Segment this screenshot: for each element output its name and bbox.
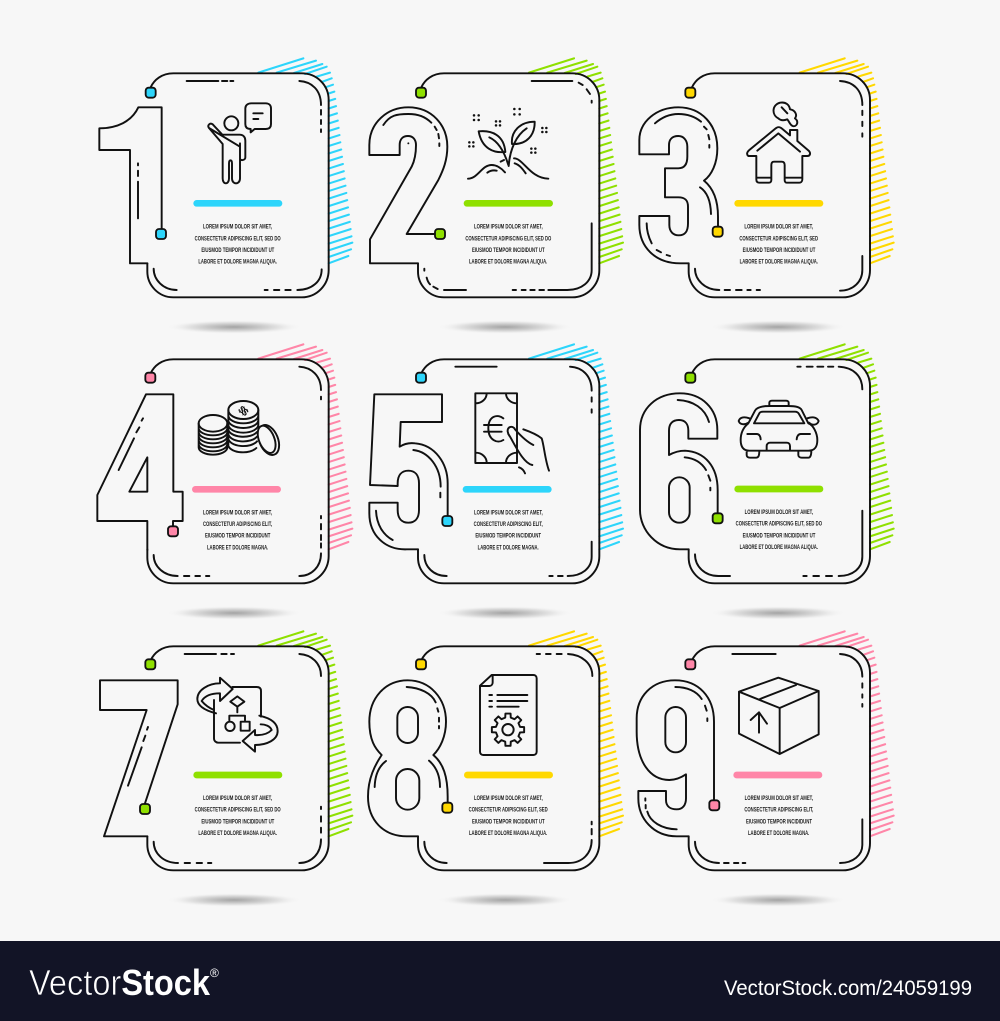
text block: CONSECTETUR ADIPISCING ELIT, SED DO (465, 235, 551, 242)
text block: EIUSMOD TEMPOR INCIDIDUNT UT (201, 247, 274, 254)
text block: LABORE ET DOLORE MAGNA ALIQUA. (198, 259, 277, 266)
frame (418, 359, 599, 583)
hatching (800, 58, 894, 263)
text block: CONSECTETUR ADIPISCING ELIT, (474, 521, 543, 528)
text block (736, 509, 822, 551)
text block: LOREM IPSUM DOLOR SIT AMET, (474, 509, 543, 516)
text block: EIUSMOD TEMPOR INCIDIDUNT (475, 533, 541, 540)
icon: person with speech bubble (208, 103, 271, 183)
text block: LOREM IPSUM DOLOR SIT AMET, (474, 795, 543, 802)
panel: card 4 (97, 344, 352, 583)
connector dot top (685, 88, 695, 98)
connector dot top (145, 373, 155, 383)
text block: LOREM IPSUM DOLOR SIT AMET, (745, 509, 813, 516)
panel: card 3 (639, 58, 894, 297)
frame (147, 359, 329, 583)
text block: CONSECTETUR ADIPISCING ELIT, (203, 521, 272, 528)
text block: LABORE ET DOLORE MAGNA. (478, 544, 539, 551)
text block: LABORE ET DOLORE MAGNA ALIQUA. (469, 259, 547, 266)
number 8 (368, 680, 448, 836)
icon: coin stacks (199, 401, 283, 458)
frame (689, 73, 870, 297)
logo wordmark: VectorStock (29, 962, 211, 1003)
panel: card 2 (369, 58, 623, 297)
text block: EIUSMOD TEMPOR INCIDIDUNT UT (201, 818, 274, 825)
number 5 (369, 394, 448, 549)
divider bar (464, 772, 553, 778)
panel: card 6 (640, 344, 894, 583)
text block: LABORE ET DOLORE MAGNA ALIQUA. (198, 830, 277, 837)
panel: card 7 (100, 631, 352, 870)
text block: LABORE ET DOLORE MAGNA ALIQUA. (740, 544, 818, 551)
text block: CONSECTETUR ADIPISCING ELIT, (744, 807, 813, 814)
image id url: VectorStock.com/24059199 (724, 977, 972, 1000)
divider bar (733, 772, 822, 778)
connector dot bottom (435, 229, 445, 239)
connector dot bottom (140, 804, 150, 814)
connector dot bottom (713, 513, 723, 523)
text block (744, 795, 813, 837)
icon: euro banknote in hand (475, 393, 549, 473)
accent lines (119, 367, 321, 576)
hatching (258, 58, 352, 263)
text block: EIUSMOD TEMPOR INCIDIDUNT (205, 533, 270, 540)
connector dot top (685, 373, 695, 383)
hatching (800, 631, 894, 836)
accent lines (645, 654, 862, 863)
hatching (800, 344, 894, 549)
divider bar (463, 486, 552, 493)
icon: algorithm flow with rotating arrows (197, 678, 278, 752)
text block: LOREM IPSUM DOLOR SIT AMET, (474, 224, 543, 231)
icon: document with gear (480, 675, 537, 755)
connector dot bottom (713, 227, 723, 237)
text block (469, 795, 548, 837)
number 6 (640, 393, 718, 549)
connector dot bottom (442, 516, 452, 526)
dollar signs: $$ (236, 404, 250, 419)
icon: taxi (739, 401, 819, 458)
hatching (258, 344, 352, 549)
text block: LABORE ET DOLORE MAGNA. (207, 544, 268, 551)
text block: CONSECTETUR ADIPISCING ELIT, SED DO (195, 807, 281, 814)
frame (418, 646, 599, 870)
number 6 counter (669, 477, 690, 523)
icon: growing plant (468, 109, 548, 179)
accent lines (678, 367, 862, 576)
divider bar (193, 772, 282, 778)
text block (465, 224, 551, 266)
connector dot bottom (168, 526, 178, 536)
connector dot top (146, 88, 156, 98)
frame (418, 73, 599, 297)
frame (689, 646, 870, 870)
text block (203, 509, 272, 551)
registered mark: ® (210, 966, 219, 980)
text block: EIUSMOD TEMPOR INCIDIDUNT (746, 818, 812, 825)
panel: card 5 (369, 344, 623, 583)
text block: LOREM IPSUM DOLOR SIT AMET, (203, 795, 272, 802)
accent lines (138, 81, 322, 290)
connector dot top (416, 373, 426, 383)
text block: LOREM IPSUM DOLOR SIT AMET, (203, 224, 272, 231)
accent lines (128, 654, 321, 863)
connector dot top (685, 659, 695, 669)
divider bar (734, 200, 823, 207)
text block: LABORE ET DOLORE MAGNA ALIQUA. (740, 259, 818, 266)
hatching (258, 631, 352, 836)
frame (147, 646, 329, 870)
text block: EIUSMOD TEMPOR INCIDIDUNT UT (472, 818, 545, 825)
number 9 (637, 680, 714, 836)
divider bar (193, 200, 282, 207)
text block: LOREM IPSUM DOLOR SIT AMET, (203, 509, 272, 516)
text block: LOREM IPSUM DOLOR SIT AMET, (745, 795, 813, 802)
text block (739, 224, 818, 266)
text block: LABORE ET DOLORE MAGNA ALIQUA. (469, 830, 547, 837)
number 1 (99, 107, 162, 263)
text block (474, 509, 543, 551)
text block: EIUSMOD TEMPOR INCIDIDUNT UT (472, 247, 545, 254)
text block (195, 795, 281, 837)
frame (689, 359, 870, 583)
number 7 (100, 680, 178, 836)
footer bar (0, 941, 1000, 1021)
text block: LOREM IPSUM DOLOR SIT AMET, (744, 224, 813, 231)
text block: LABORE ET DOLORE MAGNA. (748, 830, 809, 837)
divider bar (192, 486, 281, 493)
hatching (529, 631, 623, 836)
text block: EIUSMOD TEMPOR INCIDIDUNT UT (743, 532, 815, 539)
panel: card 8 (368, 631, 623, 870)
number 9 counter (665, 707, 686, 752)
number 2 (369, 107, 447, 263)
icon: parcel box with up arrow (739, 678, 819, 754)
accent lines (647, 81, 862, 291)
connector dot bottom (156, 229, 166, 239)
number 8 counters (396, 707, 419, 810)
text block: CONSECTETUR ADIPISCING ELIT, SED (469, 807, 548, 814)
number 3 (639, 107, 718, 263)
divider bar (464, 200, 553, 207)
accent lines (376, 367, 592, 576)
connector dot top (416, 88, 426, 98)
text block: CONSECTETUR ADIPISCING ELIT, SED DO (736, 521, 822, 528)
text block: CONSECTETUR ADIPISCING ELIT, SED DO (195, 235, 281, 242)
connector dot top (145, 659, 155, 669)
text block: EIUSMOD TEMPOR INCIDIDUNT UT (743, 247, 815, 254)
connector dot top (416, 659, 426, 669)
hatching (529, 344, 623, 549)
divider bar (734, 486, 823, 492)
text block: CONSECTETUR ADIPISCING ELIT, SED (739, 235, 818, 242)
accent lines (383, 81, 592, 290)
connector dot bottom (442, 803, 452, 813)
icon: house with chimney smoke (747, 102, 810, 183)
floor shadows (166, 320, 846, 907)
connector dot bottom (709, 800, 719, 810)
text block (195, 224, 281, 266)
accent lines (375, 654, 592, 863)
hatching (529, 58, 623, 263)
number 4 (97, 394, 183, 550)
panel: card 1 (99, 58, 352, 297)
frame (147, 73, 329, 297)
panel: card 9 (637, 631, 894, 870)
